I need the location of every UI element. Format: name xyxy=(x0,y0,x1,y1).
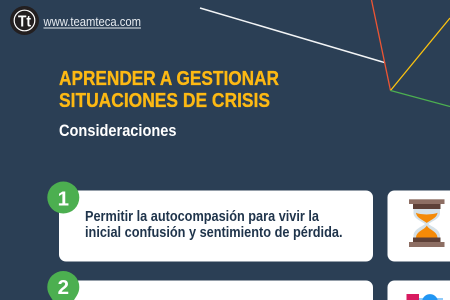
title xyxy=(59,67,279,112)
decorative rays: white, red, yellow, green xyxy=(200,0,450,106)
item 1 text: Permitir la autocompasión para vivir la xyxy=(85,209,320,225)
badge: number 1 xyxy=(47,182,79,214)
logo: Tt badge: Tt xyxy=(18,14,32,30)
panel: icon card 1 xyxy=(388,190,450,262)
title: APRENDER A GESTIONAR xyxy=(59,67,279,90)
panel: item 2 card xyxy=(59,280,373,300)
item 1 text: inicial confusión y sentimiento de pérdida. xyxy=(85,225,342,241)
badge: number 1: 1 xyxy=(58,187,69,210)
badge: number 2: 2 xyxy=(58,276,69,299)
panel: icon card 2 xyxy=(388,280,450,300)
title: SITUACIONES DE CRISIS xyxy=(59,89,270,112)
icon: shapes xyxy=(406,294,443,300)
website link: www.teamteca.com xyxy=(43,15,141,29)
item 1 text xyxy=(85,209,342,241)
icon: hourglass xyxy=(409,199,444,247)
logo: Tt badge xyxy=(10,6,39,35)
panel: item 1 card xyxy=(59,190,373,262)
subtitle: Consideraciones xyxy=(59,122,176,140)
badge: number 2 xyxy=(47,271,79,300)
